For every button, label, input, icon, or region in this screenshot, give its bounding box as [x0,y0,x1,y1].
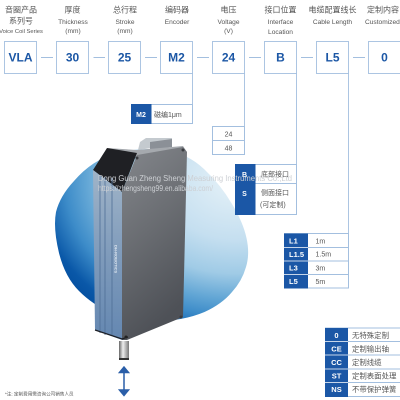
cable length options [284,234,348,288]
interface options: (可定制) [260,200,286,209]
code values: 0 [381,50,388,64]
header labels: Customized [365,19,400,26]
customization options: CE [331,344,342,354]
watermark: https://zhengsheng99.en.alibaba.com/ [98,184,214,193]
header labels: Stroke [115,19,135,26]
cable length options: L5 [289,277,298,286]
customization options: CC [331,358,342,367]
code values: VLA [8,50,33,64]
actuator product: DH-ROBOTICS [114,245,118,274]
header labels: Thickness [58,19,89,26]
code boxes [4,42,400,234]
voltage options [212,126,244,154]
interface options: 侧面接口 [261,188,289,197]
cable length options: 1.5m [316,252,331,258]
code values: M2 [168,50,185,64]
header labels: Voice Coil Series [0,29,43,35]
code values: 25 [118,50,131,64]
customization options: 定制线缆 [352,358,382,367]
header labels: Cable Length [313,19,352,26]
cable length options: L3 [289,264,298,272]
customization options: 定制输出轴 [352,344,389,354]
interface options: 底部接口 [261,170,289,178]
header labels: 接口位置 [264,4,296,14]
customization options: 定制表面处理 [352,372,397,380]
encoder option [131,104,192,124]
header labels: (V) [224,28,233,35]
header labels: 编码器 [165,4,189,14]
customization options: ST [332,372,342,380]
header labels: Interface [268,19,294,26]
code values: 30 [66,50,79,64]
customization options: 不带保护弹簧 [352,385,397,394]
interface options: B [242,172,247,179]
customization options: 无特殊定制 [352,331,389,340]
interface options: S [242,191,247,198]
code values: L5 [325,50,340,64]
encoder option: M2 [136,112,146,119]
encoder option: 磁编1μm [154,110,182,119]
header labels: 总行程 [113,4,137,14]
header labels [0,4,400,36]
footnote: *注: 定制费用需咨询公司销售人员 [5,390,74,398]
header labels: 系列号 [9,16,33,26]
actuator product [93,138,187,360]
header labels: 音圈产品 [5,4,37,14]
header labels: 定制内容 [367,4,399,14]
watermark [98,174,292,193]
voltage options: 48 [225,146,232,152]
customization options: 0 [334,331,339,340]
customization options: NS [331,385,342,394]
cable length options: 3m [316,266,325,272]
customization options [325,328,400,397]
cable length options: L1 [289,236,298,246]
cable length options: 1m [316,238,325,246]
voltage options: 24 [225,132,232,138]
cable length options: 5m [316,279,325,286]
code values: 24 [222,50,235,64]
header labels: 电缆配置线长 [308,4,356,14]
code values [8,50,388,64]
code values: B [276,50,285,64]
header labels: (mm) [65,28,81,35]
header labels: Location [268,29,293,36]
interface options [235,164,296,215]
gradient circle [55,149,248,321]
header labels: Voltage [218,19,240,26]
header labels: Encoder [165,19,190,26]
header labels: (mm) [117,28,133,35]
cable length options: L1.5 [289,250,304,259]
header labels: 厚度 [64,4,80,14]
watermark: Dong Guan Zheng Sheng Measuring Instruments Co.,Ltd [98,174,292,183]
header labels: 电压 [220,4,236,14]
motion arrow [120,367,128,396]
